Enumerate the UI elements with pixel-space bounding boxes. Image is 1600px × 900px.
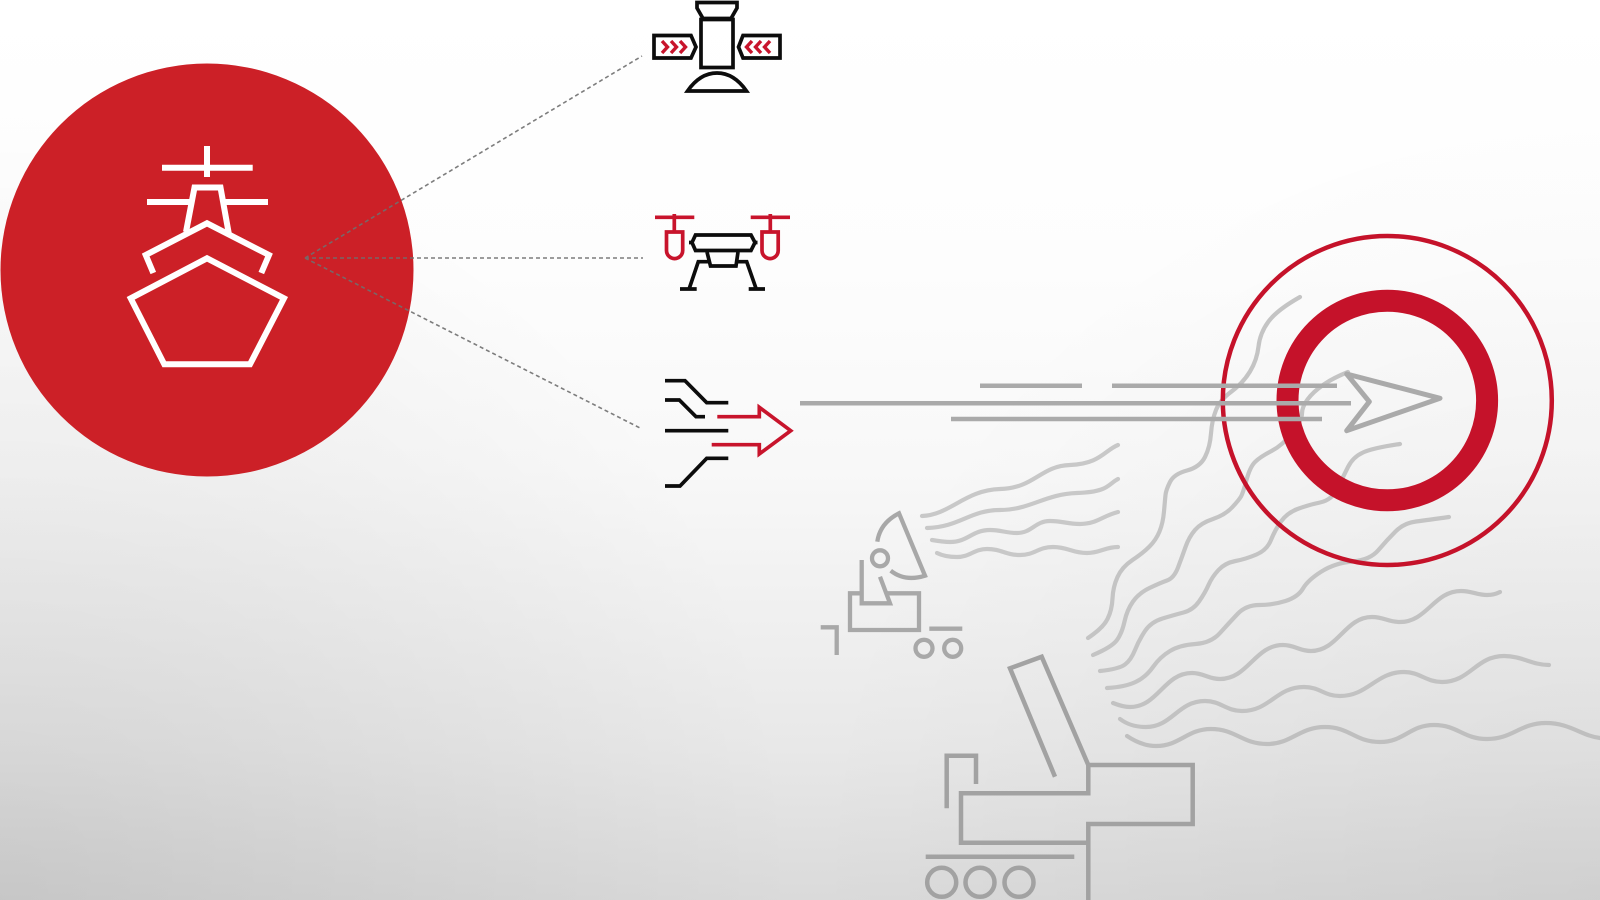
target rings: [1223, 236, 1552, 565]
routing lines: [665, 381, 728, 486]
satellite chevrons: [662, 41, 770, 53]
dashed connector lines: [305, 56, 643, 429]
icon: warship: [131, 146, 284, 364]
red ship circle: [0, 64, 414, 476]
speed lines and missile: [800, 374, 1440, 431]
icon: missile launcher vehicle: [926, 657, 1193, 900]
missile outline: [1347, 374, 1440, 431]
radio waves: [922, 297, 1600, 746]
icon: drone: [655, 214, 790, 289]
red arrow: [712, 407, 791, 454]
drone rotors: [655, 214, 790, 259]
icon: radar truck: [821, 513, 962, 657]
icon: signal routing arrow: [665, 381, 791, 486]
drone body: [680, 235, 765, 289]
icon: satellite: [654, 2, 780, 91]
